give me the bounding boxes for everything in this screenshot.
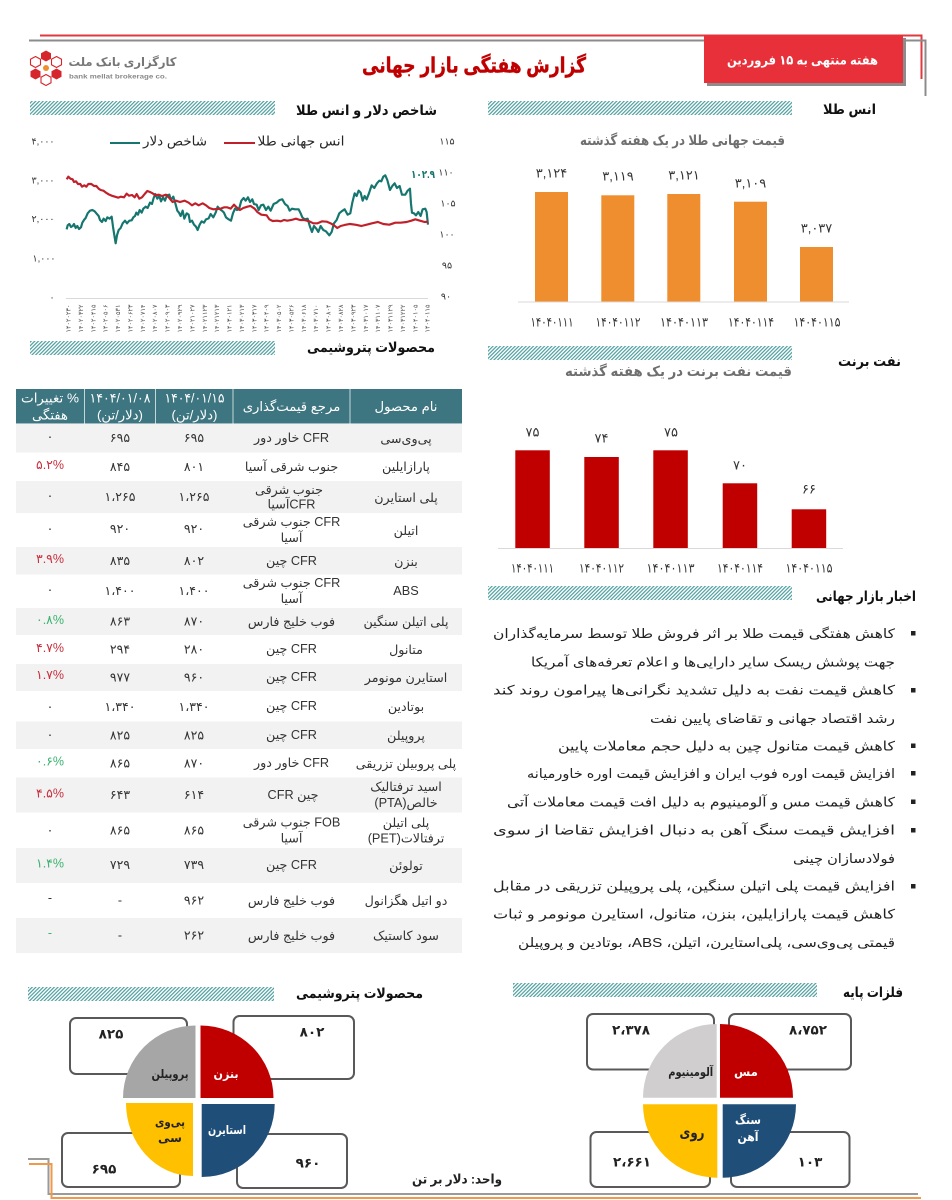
row: paraxylene: جنوب شرقی آسیا bbox=[245, 459, 338, 475]
legend: انس جهانی طلا bbox=[258, 134, 344, 150]
left axis: ۳,۰۰۰ bbox=[31, 176, 55, 186]
row: benzene: ۸۳۵ bbox=[110, 554, 130, 568]
date axis labels: ۱۴۰۲۰۷۱۴ bbox=[140, 304, 147, 332]
row: paraxylene bbox=[36, 458, 430, 475]
row: ABS: ۱،۴۰۰ bbox=[179, 584, 209, 598]
pie: petrochemicals: پی‌وی bbox=[155, 1115, 185, 1130]
values bbox=[612, 1022, 828, 1170]
date axis labels: ۱۴۰۲۰۲۳۰ bbox=[66, 305, 72, 332]
table header: (دلار/تن) bbox=[97, 408, 143, 424]
date axis labels: ۱۴۰۴۰۱۱۵ bbox=[424, 304, 432, 332]
value boxes bbox=[587, 1014, 851, 1187]
bar chart: brent bbox=[498, 424, 843, 576]
date axis labels: ۱۴۰۳۰۹۲۳ bbox=[350, 304, 357, 332]
bar chart: gold: ۳,۱۱۹ bbox=[602, 168, 634, 184]
row: toluene: ۱.۴% bbox=[36, 856, 64, 870]
values: ۲،۳۷۸ bbox=[612, 1022, 651, 1038]
line chart bbox=[67, 175, 428, 243]
row: ABS: آسیا bbox=[281, 591, 303, 606]
bar chart: gold: ۱۴۰۴۰۱۱۴ bbox=[728, 314, 774, 330]
heading: محصولات پتروشیمی bbox=[296, 985, 423, 1002]
legend bbox=[110, 134, 344, 150]
bar chart: brent: ۱۴۰۴۰۱۱۵ bbox=[786, 560, 833, 576]
bar chart: gold: ۳,۱۰۹ bbox=[735, 176, 766, 190]
row: PET: پلی اتیلن bbox=[383, 816, 430, 831]
row: injection polypropylene: پلی پروبیلن تزریقی bbox=[356, 757, 457, 772]
row: PET bbox=[47, 816, 445, 846]
right axis: ۱۱۵ bbox=[439, 136, 455, 148]
left axis: ۴,۰۰۰ bbox=[31, 136, 55, 148]
heading: اخبار بازار جهانی bbox=[816, 588, 916, 605]
row: polystyrene: ۱،۲۶۵ bbox=[179, 490, 210, 504]
news bullets: افزایش قیمت اوره فوب ایران و افزایش قیمت اوره خاورمیانه bbox=[527, 766, 895, 782]
row: ethylene: ۰ bbox=[47, 522, 53, 536]
row: injection polypropylene: ۸۶۵ bbox=[110, 756, 130, 770]
news bullets: کاهش قیمت مس و آلومینیوم به دلیل افت قیمت معاملات آتی bbox=[507, 794, 896, 810]
row: ethylene: ۹۲۰ bbox=[184, 522, 204, 536]
row: butadiene: ۱،۳۴۰ bbox=[105, 700, 135, 714]
row: ethylene: آسیا bbox=[281, 530, 303, 545]
left axis bbox=[31, 136, 56, 304]
section hatch bbox=[488, 586, 792, 600]
row: ethylene: CFR جنوب شرقی bbox=[243, 515, 340, 530]
row: styrene monomer: ۱.۷% bbox=[36, 668, 64, 682]
row: polystyrene: ۱،۲۶۵ bbox=[105, 490, 136, 504]
pie: metals bbox=[643, 1024, 796, 1178]
date axis labels: ۱۴۰۳۰۲۱۳ bbox=[239, 304, 246, 332]
news bullets: افزایش قیمت سنگ آهن به دنبال افزایش تقاضا از سوی bbox=[493, 822, 895, 838]
pie: metals: سنگ bbox=[735, 1113, 761, 1127]
values bbox=[92, 1024, 325, 1176]
row: injection polypropylene: ۸۷۰ bbox=[184, 756, 204, 770]
panel: brent oil bbox=[488, 346, 901, 576]
row: paraxylene: پارازایلین bbox=[382, 460, 430, 475]
table header: (دلار/تن) bbox=[172, 408, 217, 424]
row: propylene bbox=[47, 728, 425, 744]
table header: ۱۴۰۴/۰۱/۰۸ bbox=[90, 390, 150, 406]
row: propylene: CFR چین bbox=[266, 728, 317, 743]
date axis labels: ۱۴۰۲۰۹۰۳ bbox=[165, 304, 172, 332]
row: caustic soda bbox=[48, 926, 439, 944]
row: butadiene: CFR چین bbox=[266, 699, 317, 714]
section hatch bbox=[488, 346, 792, 360]
row: PET: FOB جنوب شرقی bbox=[243, 816, 340, 830]
row: PTA bbox=[36, 780, 442, 811]
news bullets: قیمتی پی‌وی‌سی، پلی‌استایرن، اتیلن، ABS، بوتادین و پروپیلن bbox=[518, 935, 895, 951]
date axis labels bbox=[66, 304, 432, 332]
row: styrene monomer: CFR چین bbox=[266, 670, 317, 685]
last value label: ۱۰۲.۹ bbox=[411, 169, 435, 181]
row: PVC: پی‌وی‌سی bbox=[380, 432, 432, 447]
row: styrene monomer bbox=[36, 668, 447, 686]
pie: petrochemicals: پروپیلن bbox=[152, 1067, 188, 1082]
footer frame bbox=[28, 1159, 921, 1198]
news bullets bbox=[493, 626, 916, 951]
row: PET: ۸۶۵ bbox=[110, 824, 130, 838]
bar chart: brent: ۷۵ bbox=[526, 424, 539, 440]
bar chart: brent: ۱۴۰۴۰۱۱۱ bbox=[511, 560, 554, 576]
row: ethylene: اتیلن bbox=[394, 524, 418, 539]
row: paraxylene: ۸۰۱ bbox=[184, 460, 204, 474]
pie: metals: روی bbox=[680, 1124, 704, 1142]
bar chart: gold: ۱۴۰۴۰۱۱۱ bbox=[530, 314, 574, 330]
heading: محصولات پتروشیمی bbox=[307, 339, 435, 356]
row: polystyrene bbox=[47, 483, 438, 512]
row: benzene: CFR چین bbox=[266, 554, 317, 569]
row: methanol: CFR چین bbox=[266, 642, 317, 657]
row: toluene bbox=[36, 856, 423, 874]
values: ۸،۷۵۲ bbox=[789, 1022, 828, 1038]
row: PVC bbox=[47, 430, 432, 447]
bar chart: brent: ۷۵ bbox=[664, 424, 678, 440]
row: toluene: CFR چین bbox=[266, 858, 317, 873]
left axis: ۰ bbox=[49, 292, 55, 304]
row: injection polypropylene: CFR خاور دور bbox=[253, 756, 329, 771]
row: benzene: ۸۰۲ bbox=[184, 554, 204, 568]
row: PTA: ۶۱۴ bbox=[184, 788, 204, 802]
row: PET: ۸۶۵ bbox=[184, 824, 204, 838]
row: HDPE: ۸۷۰ bbox=[184, 614, 204, 628]
heading: نفت برنت bbox=[838, 353, 901, 370]
row: caustic soda: - bbox=[48, 926, 52, 940]
row: ABS: ۱،۴۰۰ bbox=[105, 584, 135, 598]
heading: فلزات پایه bbox=[843, 984, 903, 1001]
date axis labels: ۱۴۰۳۰۸۲۸ bbox=[338, 304, 345, 332]
right axis: ۱۰۵ bbox=[440, 198, 456, 210]
news bullets: افزایش قیمت پلی اتیلن سنگین، پلی پروپیلن تزریقی در مقابل bbox=[493, 878, 895, 894]
bar chart: brent: ۱۴۰۴۰۱۱۲ bbox=[579, 560, 624, 576]
row: methanol: ۴.۷% bbox=[36, 641, 64, 655]
row: paraxylene: ۸۴۵ bbox=[110, 460, 130, 474]
row: toluene: ۷۲۹ bbox=[110, 858, 130, 872]
row: caustic soda: - bbox=[118, 928, 122, 942]
table header: نام محصول bbox=[375, 399, 437, 415]
row: polystyrene: ۰ bbox=[47, 489, 53, 503]
row: benzene bbox=[36, 552, 418, 570]
row: PVC: ۶۹۵ bbox=[184, 431, 204, 445]
row: injection polypropylene bbox=[36, 754, 457, 772]
row: styrene monomer: استایرن مونومر bbox=[364, 671, 447, 686]
pie: metals: آهن bbox=[738, 1129, 759, 1144]
right axis: ۱۰۰ bbox=[439, 230, 455, 240]
row: methanol: متانول bbox=[389, 643, 423, 658]
row: butadiene: ۱،۳۴۰ bbox=[179, 700, 209, 714]
table header: ۱۴۰۴/۰۱/۱۵ bbox=[164, 390, 224, 406]
row: caustic soda: سود کاستیک bbox=[373, 929, 439, 944]
row: PVC: ۶۹۵ bbox=[110, 431, 130, 445]
date axis labels: ۱۴۰۳۱۱۰۷ bbox=[375, 304, 382, 332]
date axis labels: ۱۴۰۳۰۶۱۸ bbox=[301, 304, 308, 332]
row: methanol: ۲۸۰ bbox=[184, 642, 204, 656]
logo subtitle: bank mellat brokerage co. bbox=[69, 74, 167, 80]
heading: شاخص دلار و انس طلا bbox=[296, 102, 437, 119]
date axis labels: ۱۴۰۲۰۵۳۱ bbox=[115, 305, 122, 332]
bar chart: gold bbox=[518, 166, 849, 330]
news bullets: کاهش قیمت پارازایلین، بنزن، متانول، استایرن مونومر و ثبات bbox=[493, 906, 896, 922]
date axis labels: ۱۴۰۳۰۷۱۰ bbox=[313, 305, 320, 332]
bar chart: brent: ۱۴۰۴۰۱۱۴ bbox=[717, 560, 763, 576]
chart title: قیمت نفت برنت در یک هفته گذشته bbox=[565, 363, 792, 380]
row: propylene: ۸۲۵ bbox=[110, 728, 130, 742]
bar chart: brent: ۷۴ bbox=[595, 430, 608, 446]
pie: petrochemicals: بنزن bbox=[214, 1067, 238, 1081]
legend: شاخص دلار bbox=[142, 134, 207, 150]
section hatch bbox=[30, 101, 275, 115]
row: methanol bbox=[36, 641, 423, 658]
baseline bbox=[66, 298, 428, 300]
row: ethylene: ۹۲۰ bbox=[110, 522, 130, 536]
row: caustic soda: فوب خلیج فارس bbox=[248, 929, 335, 944]
row: toluene: ۷۳۹ bbox=[184, 858, 204, 872]
row: HDPE: فوب خلیج فارس bbox=[248, 615, 335, 630]
bar chart: gold: ۳,۱۲۴ bbox=[536, 166, 567, 180]
row: HDPE bbox=[36, 613, 449, 630]
values: ۲،۶۶۱ bbox=[613, 1154, 651, 1170]
row: polystyrene: CFRآسیا bbox=[268, 496, 315, 512]
row: toluene: تولوئن bbox=[389, 859, 423, 874]
pie: petrochemicals: سی bbox=[158, 1131, 182, 1145]
row: PET: ترفتالات(PET) bbox=[368, 832, 445, 846]
values: ۹۶۰ bbox=[296, 1156, 320, 1170]
right axis: ۹۵ bbox=[442, 260, 452, 272]
row: 2-ethylhexanol bbox=[48, 891, 447, 909]
left axis: ۲,۰۰۰ bbox=[31, 214, 55, 225]
date badge: هفته منتهی به ۱۵ فروردین bbox=[727, 52, 878, 68]
bar chart: gold: ۳,۱۲۱ bbox=[668, 168, 700, 182]
pie: petrochemicals: استایرن bbox=[208, 1123, 246, 1137]
row: PVC: ۰ bbox=[47, 430, 53, 444]
row: ABS bbox=[47, 576, 419, 606]
row: styrene monomer: ۹۶۰ bbox=[184, 670, 204, 684]
row: methanol: ۲۹۴ bbox=[110, 642, 130, 656]
row: propylene: پروپیلن bbox=[387, 729, 425, 744]
row: butadiene bbox=[47, 699, 424, 715]
heading: انس طلا bbox=[823, 101, 876, 117]
bar chart: gold: ۱۴۰۴۰۱۱۲ bbox=[596, 314, 641, 330]
date axis labels: ۱۴۰۲۱۲۱۳ bbox=[214, 304, 221, 332]
news bullets: کاهش قیمت متانول چین به دلیل حجم معاملات پایین bbox=[558, 738, 896, 754]
row: ABS: ABS bbox=[393, 584, 419, 598]
value boxes bbox=[62, 1016, 354, 1188]
pie: petrochemicals bbox=[123, 1026, 275, 1177]
table rows bbox=[36, 430, 457, 944]
date axis labels: ۱۴۰۳۰۳۱۷ bbox=[251, 304, 258, 332]
row: styrene monomer: ۹۷۷ bbox=[110, 670, 130, 684]
right axis: ۱۱۰ bbox=[438, 168, 454, 178]
date axis labels: ۱۴۰۲۰۹۲۹ bbox=[177, 304, 184, 332]
icon: logo mark bbox=[30, 50, 62, 86]
row: 2-ethylhexanol: دو اتیل هگزانول bbox=[365, 893, 447, 909]
section hatch bbox=[28, 987, 274, 1001]
panel: base metals bbox=[513, 983, 903, 1187]
date axis labels: ۱۴۰۳۰۴۰۹ bbox=[264, 304, 271, 332]
row: HDPE: ۸۶۳ bbox=[110, 614, 130, 628]
date axis labels: ۱۴۰۳۰۵۲۶ bbox=[288, 305, 296, 332]
bar chart: brent: ۱۴۰۴۰۱۱۳ bbox=[646, 560, 695, 576]
panel: petrochemical prices bbox=[28, 985, 423, 1188]
logo bbox=[30, 50, 177, 86]
row: PVC: CFR خاور دور bbox=[253, 431, 329, 446]
date axis labels: ۱۴۰۳۰۸۰۴ bbox=[326, 304, 333, 332]
row: PTA: اسید ترفتالیک bbox=[370, 780, 442, 795]
row: caustic soda: ۲۶۲ bbox=[184, 928, 204, 942]
unit note: واحد: دلار بر تن bbox=[412, 1172, 502, 1186]
table header: هفتگی bbox=[32, 408, 68, 422]
row: PTA: ۶۴۳ bbox=[110, 788, 130, 802]
row: ABS: ۰ bbox=[47, 583, 53, 597]
row: benzene: بنزن bbox=[394, 555, 418, 570]
row: PTA: چین CFR bbox=[268, 788, 318, 803]
date axis labels: ۱۴۰۲۰۳۲۲ bbox=[78, 304, 85, 332]
row: polystyrene: پلی استایرن bbox=[374, 491, 438, 506]
panel: dollar index and gold bbox=[30, 101, 456, 332]
row: polystyrene: جنوب شرقی bbox=[255, 483, 323, 498]
logo name: کارگزاری بانک ملت bbox=[68, 55, 177, 69]
row: 2-ethylhexanol: - bbox=[118, 894, 122, 908]
date axis labels: ۱۴۰۲۰۵۰۶ bbox=[103, 305, 110, 332]
date axis labels: ۱۴۰۳۰۵۰۲ bbox=[276, 304, 283, 332]
panel: petrochemical table bbox=[16, 339, 462, 953]
bar chart: gold: ۱۴۰۴۰۱۱۳ bbox=[660, 314, 708, 330]
row: propylene: ۸۲۵ bbox=[184, 728, 204, 742]
date axis labels: ۱۴۰۲۰۴۱۵ bbox=[90, 304, 97, 332]
news bullets: فولادسازان چینی bbox=[793, 851, 895, 867]
row: ABS: CFR جنوب شرقی bbox=[243, 576, 340, 591]
row: butadiene: بوتادین bbox=[388, 700, 424, 715]
row: PET: ۰ bbox=[47, 824, 53, 838]
row: 2-ethylhexanol: ۹۶۲ bbox=[184, 894, 204, 908]
section hatch bbox=[30, 341, 275, 355]
row: ethylene bbox=[47, 515, 418, 545]
row: injection polypropylene: ۰.۶% bbox=[36, 754, 64, 768]
pie: metals: مس bbox=[734, 1065, 758, 1079]
date axis labels: ۱۴۰۲۰۸۰۷ bbox=[152, 304, 159, 332]
left axis: ۱,۰۰۰ bbox=[32, 254, 56, 264]
news bullets: کاهش هفتگی قیمت طلا بر اثر فروش طلا توسط سرمایه‌گذاران bbox=[493, 626, 896, 642]
values: ۸۰۲ bbox=[300, 1024, 325, 1040]
table header bbox=[16, 389, 462, 424]
news bullets: جهت پوشش ریسک سایر دارایی‌ها و اعلام تعرفه‌های آمریکا bbox=[531, 654, 895, 670]
header frame bbox=[29, 36, 926, 96]
section hatch bbox=[513, 983, 817, 997]
section hatch bbox=[488, 101, 792, 115]
values: ۱۰۳ bbox=[798, 1154, 823, 1170]
date axis labels: ۱۴۰۲۰۶۲۳ bbox=[128, 304, 134, 332]
gold ounce line bbox=[67, 177, 428, 228]
bar chart: gold: ۳,۰۳۷ bbox=[801, 220, 832, 236]
chart title: قیمت جهانی طلا در یک هفته گذشته bbox=[580, 132, 785, 149]
right axis: ۹۰ bbox=[441, 292, 451, 302]
title: گزارش هفتگی بازار جهانی bbox=[362, 52, 587, 78]
row: butadiene: ۰ bbox=[47, 700, 53, 714]
bar chart: brent: ۷۰ bbox=[733, 458, 747, 472]
row: PTA: ۴.۵% bbox=[36, 786, 64, 800]
date axis labels: ۱۴۰۳۰۱۲۱ bbox=[226, 305, 234, 332]
row: PET: آسیا bbox=[281, 830, 303, 846]
row: PTA: خالص(PTA) bbox=[374, 796, 438, 811]
date axis labels: ۱۴۰۳۱۱۲۹ bbox=[388, 304, 395, 332]
date axis labels: ۱۴۰۲۱۱۲۳ bbox=[202, 304, 209, 332]
panel: world market news bbox=[488, 586, 916, 951]
table header: % تغییرات bbox=[21, 390, 79, 406]
row: propylene: ۰ bbox=[47, 728, 53, 742]
bar chart: brent: ۶۶ bbox=[802, 482, 816, 496]
row: 2-ethylhexanol: فوب خلیج فارس bbox=[248, 894, 335, 909]
date axis labels: ۱۴۰۴۰۱۰۵ bbox=[412, 304, 419, 332]
panel: gold ounce bbox=[488, 101, 876, 330]
row: HDPE: ۰.۸% bbox=[36, 613, 64, 627]
date badge bbox=[704, 35, 906, 86]
dollar index line bbox=[67, 175, 428, 243]
news bullets: کاهش قیمت نفت به دلیل تشدید نگرانی‌ها پیرامون روند کند bbox=[493, 682, 896, 698]
row: paraxylene: ۵.۲% bbox=[36, 458, 64, 472]
right axis bbox=[438, 136, 456, 302]
values: ۶۹۵ bbox=[92, 1162, 116, 1176]
table header: مرجع قیمت‌گذاری bbox=[243, 399, 340, 415]
row: benzene: ۳.۹% bbox=[36, 552, 64, 566]
bar chart: gold: ۱۴۰۴۰۱۱۵ bbox=[794, 314, 841, 330]
date axis labels: ۱۴۰۳۱۲۲۲ bbox=[400, 304, 407, 332]
table row backgrounds bbox=[16, 424, 462, 953]
row: HDPE: پلی اتیلن سنگین bbox=[363, 614, 449, 630]
date axis labels: ۱۴۰۳۱۰۱۷ bbox=[363, 304, 370, 332]
row: 2-ethylhexanol: - bbox=[48, 891, 52, 905]
values: ۸۲۵ bbox=[99, 1026, 123, 1042]
news bullets: رشد اقتصاد جهانی و تقاضای پایین نفت bbox=[650, 711, 895, 727]
date axis labels: ۱۴۰۲۱۰۲۷ bbox=[189, 304, 196, 332]
pie: metals: آلومینیوم bbox=[668, 1064, 714, 1080]
